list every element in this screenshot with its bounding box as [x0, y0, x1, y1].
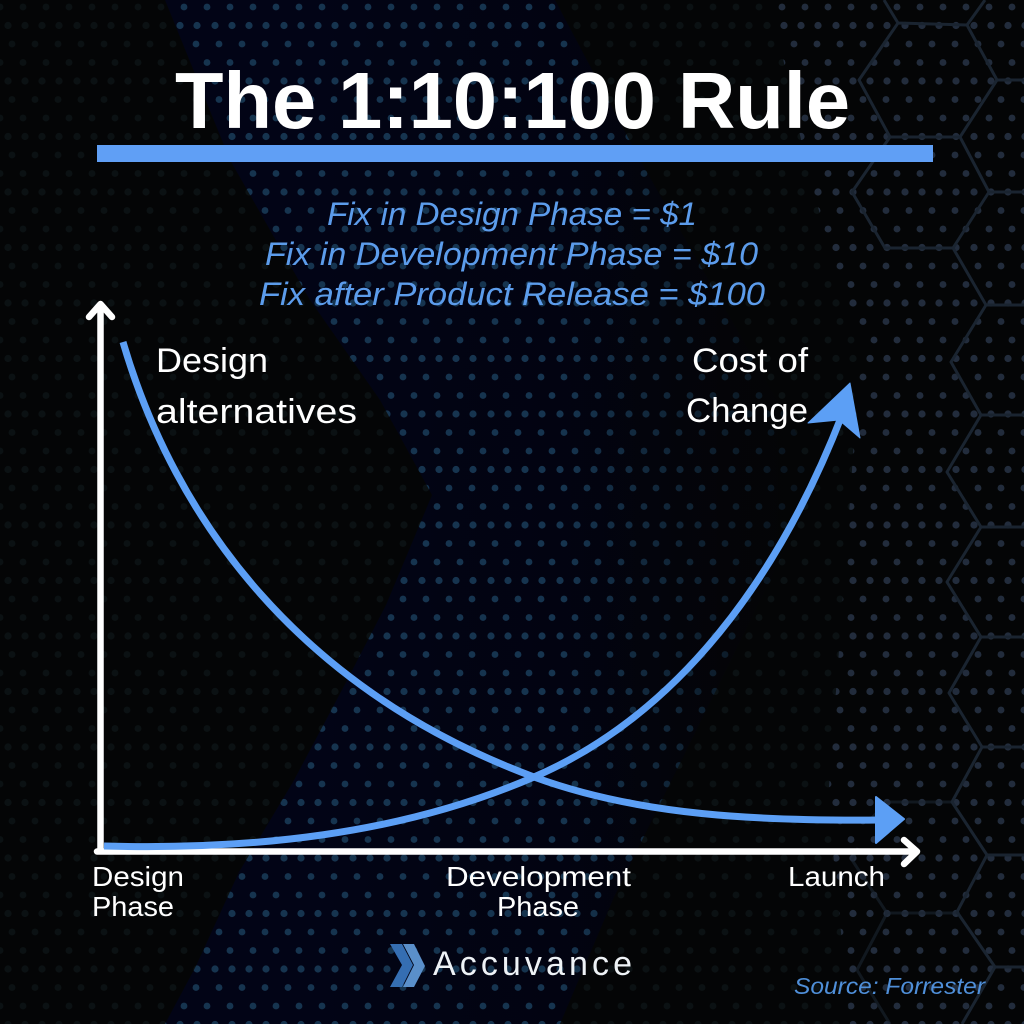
x axis label: design phase — [92, 861, 184, 922]
subtitle: cost by phase: Fix in Design Phase = $1 — [327, 196, 697, 232]
subtitle: cost by phase — [259, 196, 765, 312]
x axis label: development phase: Phase — [497, 891, 579, 922]
label: design alternatives: alternatives — [156, 393, 357, 431]
title underline bar — [97, 145, 933, 162]
y axis arrow — [89, 304, 112, 851]
title: The 1:10:100 Rule — [175, 56, 850, 145]
icon: chevrons — [390, 944, 425, 987]
wordmark: Accuvance — [433, 945, 632, 983]
source note: Source: Forrester — [794, 973, 986, 999]
subtitle: cost by phase: Fix in Development Phase = $10 — [265, 236, 758, 272]
curve: design alternatives — [123, 342, 904, 843]
label: cost of change: Cost of — [692, 342, 809, 380]
decorative hexagon grid — [852, 0, 1024, 1024]
label: cost of change — [686, 342, 809, 430]
logo: Accuvance — [390, 944, 632, 987]
chart — [89, 304, 917, 922]
label: design alternatives: Design — [156, 342, 268, 380]
subtitle: cost by phase: Fix after Product Release = $100 — [259, 276, 765, 312]
x axis label: design phase: Design — [92, 861, 184, 892]
x axis label: development phase — [446, 861, 631, 922]
label: design alternatives — [156, 342, 357, 431]
x axis label: design phase: Phase — [92, 891, 174, 922]
curve: cost of change — [104, 383, 860, 847]
label: cost of change: Change — [686, 392, 808, 430]
x axis label: development phase: Development — [446, 861, 631, 892]
x axis label: launch: Launch — [788, 861, 885, 892]
x axis arrow — [97, 840, 917, 864]
